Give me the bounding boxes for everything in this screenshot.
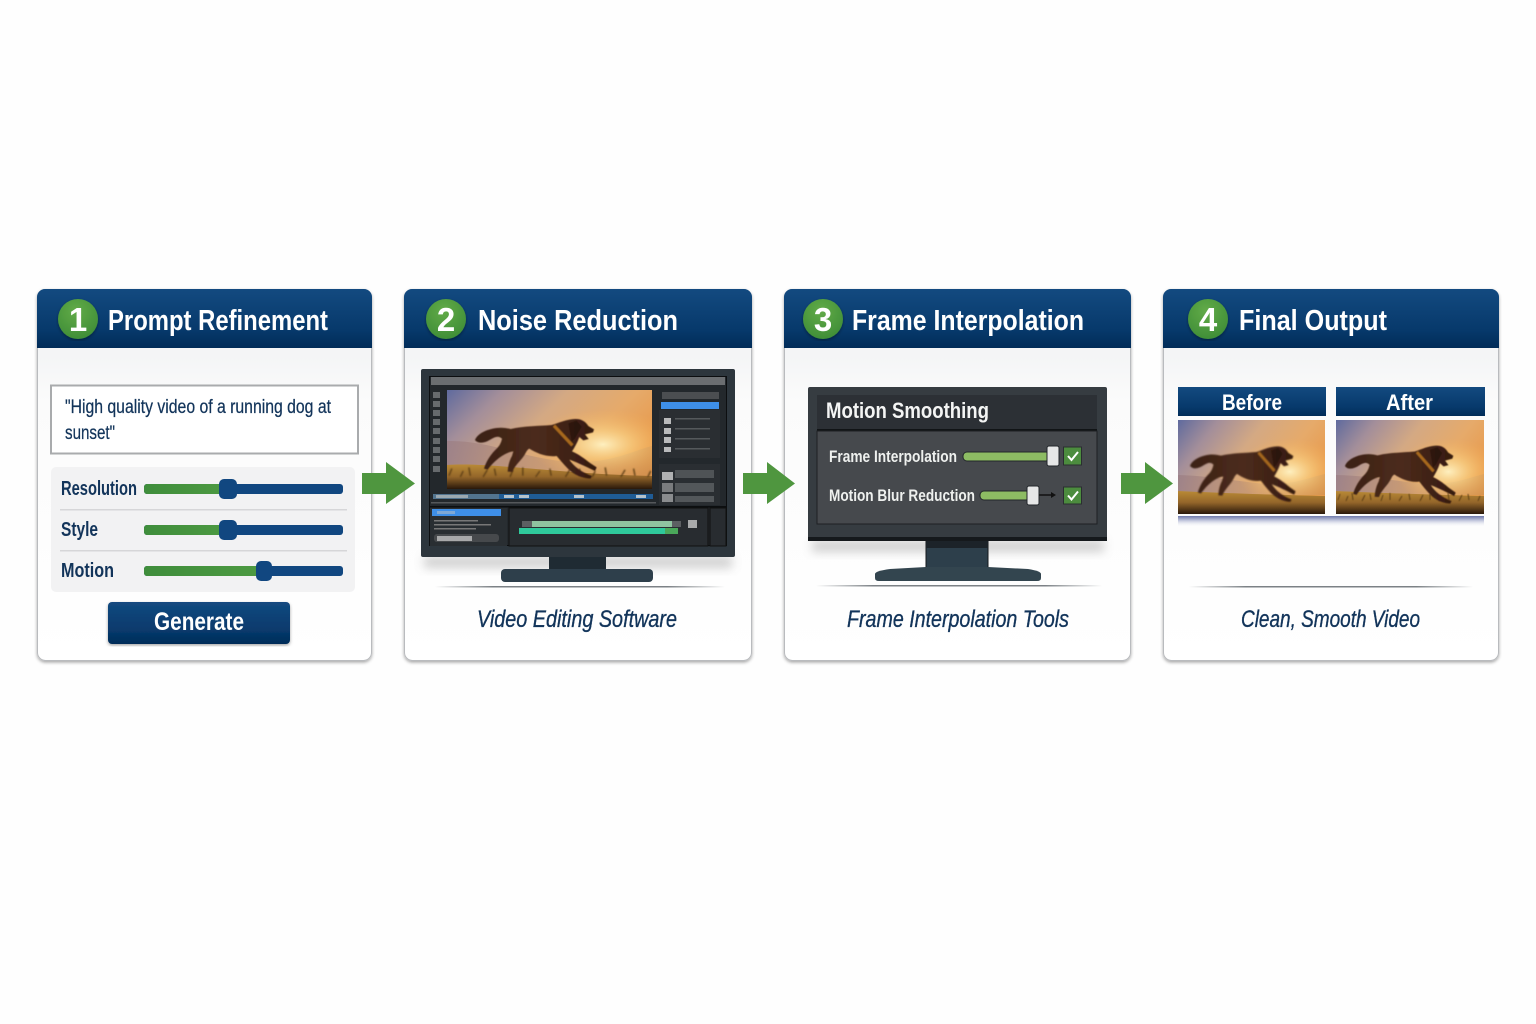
header: step 2: Noise Reduction <box>478 305 678 337</box>
playback strip <box>431 494 656 504</box>
header: step 3: 3 <box>814 301 832 338</box>
title: Motion Smoothing <box>826 398 989 423</box>
ground line <box>1189 586 1473 588</box>
panel: step 1 prompt refinement <box>37 289 372 660</box>
prompt text box <box>51 386 358 454</box>
ground line <box>435 586 725 588</box>
panel: step 4 final output <box>1163 289 1499 660</box>
slider: resolution: Resolution <box>61 478 137 500</box>
monitor: video editing software <box>421 369 735 582</box>
header: step 3: Frame Interpolation <box>852 305 1084 337</box>
caption: clean smooth video: Clean, Smooth Video <box>1241 606 1420 633</box>
tool icons <box>433 392 440 472</box>
right side panels <box>659 392 720 505</box>
prompt text box: "High quality video of a running dog at <box>65 397 332 418</box>
header: step 1: Prompt Refinement <box>108 305 328 337</box>
generate button <box>108 602 290 644</box>
before comparison: Before <box>1222 390 1282 415</box>
slider: style: Style <box>61 519 98 541</box>
timeline panel <box>509 508 726 546</box>
caption: video editing software: Video Editing Software <box>477 606 677 633</box>
lower left panel <box>430 508 507 546</box>
monitor: motion smoothing <box>808 387 1107 581</box>
header: step 3 <box>784 289 1131 348</box>
header: step 1: 1 <box>69 301 87 338</box>
after comparison <box>1336 387 1485 514</box>
slider: style <box>61 519 343 541</box>
before comparison <box>1178 387 1326 514</box>
header: step 4 <box>1163 289 1499 348</box>
arrow: step 3 to 4 <box>1121 462 1173 504</box>
video preview: running dog at sunset <box>447 390 652 489</box>
panel: step 3 frame interpolation <box>784 289 1131 660</box>
slider: motion <box>61 560 343 582</box>
ground line <box>816 585 1102 586</box>
image reflection shadow <box>1178 516 1484 527</box>
setting: frame interpolation <box>829 446 1082 466</box>
arrow: step 1 to 2 <box>362 462 415 504</box>
caption: frame interpolation tools: Frame Interpolation Tools <box>847 606 1069 633</box>
arrow: step 2 to 3 <box>743 462 795 504</box>
slider group <box>51 467 355 592</box>
generate button: Generate <box>154 608 244 636</box>
after comparison: After <box>1386 390 1433 415</box>
setting: frame interpolation: Frame Interpolation <box>829 447 957 466</box>
header: step 2 <box>404 289 752 348</box>
header: step 4: 4 <box>1199 301 1218 338</box>
setting: motion blur reduction: Motion Blur Reduction <box>829 486 975 505</box>
header: step 4: Final Output <box>1239 305 1387 337</box>
header: step 1 <box>37 289 372 348</box>
header: step 2: 2 <box>437 301 455 338</box>
prompt text box: sunset" <box>65 423 115 444</box>
slider: motion: Motion <box>61 560 114 582</box>
slider: resolution <box>61 478 343 500</box>
panel: step 2 noise reduction <box>404 289 752 660</box>
